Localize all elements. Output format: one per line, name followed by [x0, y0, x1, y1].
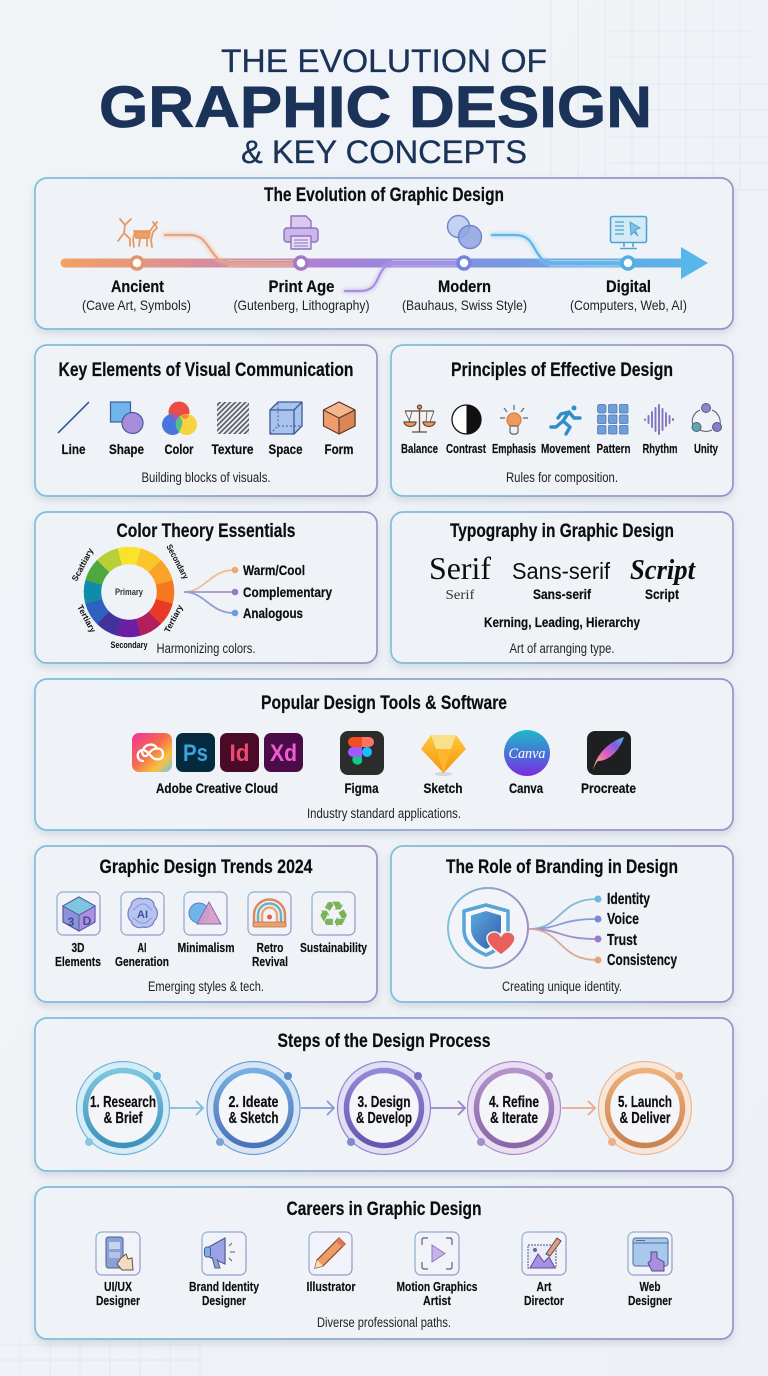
specimen labels: Sans-serif	[533, 586, 591, 602]
trend labels	[55, 940, 368, 969]
heading: key elements: Key Elements of Visual Communication	[58, 359, 354, 381]
icon: contrast	[452, 405, 481, 434]
caption: Art of arranging type.	[510, 641, 614, 656]
element labels: Form	[324, 441, 354, 457]
icon: creative cloud	[132, 733, 172, 772]
color concept labels: Complementary	[243, 584, 332, 600]
element labels: Texture	[212, 441, 254, 457]
step 1	[76, 1062, 170, 1154]
trend labels: AI	[138, 940, 146, 955]
icon: figma	[340, 731, 384, 775]
icon: sustainability recycling	[312, 892, 355, 936]
career labels: Director	[524, 1293, 564, 1308]
icon: brand identity designer	[202, 1232, 246, 1275]
brand branches	[529, 896, 602, 964]
brand labels: Voice	[607, 911, 639, 928]
career labels: Motion Graphics	[396, 1279, 478, 1294]
step 4: 4. Refine	[489, 1094, 539, 1111]
panel: typography	[391, 512, 733, 663]
color concept labels: Analogous	[243, 605, 303, 621]
career labels: Artist	[423, 1293, 452, 1308]
caption: Emerging styles & tech.	[148, 979, 264, 994]
icon: movement runner	[551, 406, 580, 434]
step 1: 1. Research	[90, 1094, 156, 1111]
brand labels: Trust	[607, 932, 637, 949]
color concept labels	[243, 562, 332, 621]
wheel labels: Tertiary	[75, 603, 98, 634]
icon: 3d elements: D	[83, 914, 92, 928]
brand labels: Identity	[607, 891, 650, 908]
heading: careers: Careers in Graphic Design	[286, 1198, 482, 1220]
type specimens	[429, 550, 696, 586]
type specimens: Sans-serif	[512, 558, 611, 584]
type specimens: Serif	[429, 550, 491, 586]
color concept labels: Warm/Cool	[243, 562, 305, 578]
tool labels: Sketch	[424, 780, 462, 796]
icon: canva	[504, 730, 550, 776]
timeline arrow	[65, 247, 708, 279]
specimen labels: Script	[645, 586, 679, 602]
heading: branding: The Role of Branding in Design	[446, 856, 678, 878]
caption: Creating unique identity.	[502, 979, 622, 994]
principle labels: Unity	[694, 441, 719, 456]
wheel labels: Secondary	[164, 542, 191, 581]
icon: space	[270, 402, 302, 434]
heading: color theory: Color Theory Essentials	[116, 520, 296, 542]
icon: photoshop: Ps	[183, 740, 208, 767]
step 3: 3. Design	[358, 1094, 410, 1111]
icon: pattern	[598, 404, 628, 434]
icon: ai generation	[121, 892, 164, 935]
icon: sketch gem	[421, 735, 466, 776]
panel: principles	[391, 345, 733, 496]
panel: key elements	[35, 345, 377, 496]
career labels: Designer	[96, 1293, 140, 1308]
arrow 2	[301, 1101, 334, 1115]
icon: indesign	[220, 733, 259, 772]
principle labels	[401, 441, 719, 456]
arrow 3	[431, 1101, 465, 1115]
tool labels: Procreate	[581, 780, 636, 796]
panel: tools	[35, 679, 733, 830]
career labels	[96, 1279, 672, 1308]
icon: retro revival	[248, 892, 291, 935]
brand labels	[607, 891, 677, 969]
heading: evolution: The Evolution of Graphic Design	[264, 184, 504, 206]
caption: Rules for composition.	[506, 470, 618, 485]
trend labels: Retro	[256, 940, 284, 955]
panel: branding	[391, 846, 733, 1002]
career labels: Designer	[628, 1293, 672, 1308]
step 5: 5. Launch	[618, 1094, 672, 1111]
icon: 3d elements	[57, 892, 100, 935]
wheel labels: Tertiary	[162, 603, 185, 634]
element labels	[62, 441, 354, 457]
career labels: Brand Identity	[189, 1279, 260, 1294]
icon: line	[58, 402, 89, 433]
era labels: Print Age	[268, 277, 334, 296]
trend labels: Elements	[55, 954, 101, 969]
era labels: Digital	[606, 277, 651, 296]
element labels: Space	[268, 441, 303, 457]
wheel labels: Scattiary	[69, 546, 95, 583]
step 2	[207, 1062, 300, 1154]
step 5	[598, 1062, 692, 1154]
trend labels: Sustainability	[300, 940, 368, 955]
icon: web designer	[628, 1232, 672, 1275]
wheel labels	[69, 542, 191, 650]
title: GRAPHIC DESIGN	[99, 75, 652, 140]
icon: ai generation: AI	[137, 909, 148, 921]
icon: form cube	[324, 402, 355, 434]
element labels: Color	[164, 441, 194, 457]
icon: 3d elements: 3	[68, 915, 75, 929]
arrow 4	[562, 1101, 595, 1115]
step 2: & Sketch	[228, 1110, 278, 1127]
timeline connectors	[165, 235, 620, 291]
type specimens: Script	[630, 555, 696, 586]
era labels: (Cave Art, Symbols)	[82, 297, 191, 313]
caption: Industry standard applications.	[307, 806, 461, 821]
brand labels: Consistency	[607, 952, 677, 969]
tool labels: Figma	[344, 780, 379, 796]
icon: color	[162, 402, 197, 435]
era labels: (Gutenberg, Lithography)	[234, 297, 370, 313]
title: THE EVOLUTION OF	[221, 43, 547, 79]
color wheel	[77, 540, 181, 644]
principle labels: Emphasis	[492, 441, 536, 456]
step 5: & Deliver	[620, 1110, 670, 1127]
principle labels: Balance	[401, 441, 438, 456]
panel: design process	[35, 1018, 733, 1171]
icon: shield with heart	[448, 888, 528, 968]
tool labels	[156, 780, 636, 796]
wheel labels: Primary	[115, 587, 143, 597]
element labels: Shape	[109, 441, 144, 457]
typography concepts: Kerning, Leading, Hierarchy	[484, 614, 640, 630]
panel: evolution timeline	[35, 178, 733, 329]
career labels: Art	[536, 1279, 552, 1294]
color concept branches	[184, 567, 238, 616]
principle labels: Pattern	[596, 441, 631, 456]
icon: art director	[522, 1232, 566, 1275]
heading: trends: Graphic Design Trends 2024	[100, 856, 313, 878]
wheel labels: Secondary	[110, 640, 148, 650]
icon: minimalism	[184, 892, 227, 935]
icon: computer monitor	[610, 216, 646, 248]
trend labels: 3D	[72, 940, 84, 955]
icon: motion graphics	[415, 1232, 459, 1275]
icon: indesign: Id	[230, 740, 250, 767]
principle labels: Movement	[541, 441, 591, 456]
step 2: 2. Ideate	[228, 1094, 279, 1111]
tool labels: Canva	[509, 780, 543, 796]
step 3	[338, 1062, 430, 1154]
specimen labels: Serif	[446, 588, 475, 603]
principle labels: Contrast	[446, 441, 486, 456]
panel: trends	[35, 846, 377, 1002]
caption: Diverse professional paths.	[317, 1315, 451, 1330]
timeline nodes	[131, 257, 634, 269]
title	[99, 43, 652, 170]
icon: rhythm waveform	[645, 405, 673, 434]
tool labels: Adobe Creative Cloud	[156, 780, 278, 796]
icon: overlapping circles	[448, 216, 482, 248]
step 3: & Develop	[356, 1110, 412, 1127]
caption: Building blocks of visuals.	[142, 470, 270, 485]
step 4	[468, 1062, 560, 1154]
heading: process: Steps of the Design Process	[278, 1030, 491, 1052]
era labels: (Bauhaus, Swiss Style)	[402, 297, 527, 313]
era labels: Ancient	[111, 277, 164, 296]
career labels: Illustrator	[306, 1279, 356, 1294]
principle labels: Rhythm	[642, 441, 678, 456]
heading: principles: Principles of Effective Design	[451, 359, 673, 381]
icon: canva: Canva	[508, 746, 546, 762]
icon: texture	[217, 402, 249, 434]
career labels: Designer	[202, 1293, 246, 1308]
title: & KEY CONCEPTS	[241, 134, 527, 170]
icon: shape	[110, 402, 143, 434]
icon: cave art	[118, 219, 157, 247]
icon: unity	[692, 404, 722, 432]
panel: careers	[35, 1187, 733, 1339]
caption: Harmonizing colors.	[156, 641, 256, 656]
trend labels: Generation	[115, 954, 169, 969]
arrow 1	[170, 1101, 203, 1115]
icon: balance	[404, 405, 435, 432]
era labels: Modern	[438, 277, 491, 296]
icon: ui/ux designer	[96, 1232, 140, 1275]
icon: xd: Xd	[270, 740, 297, 767]
heading: tools: Popular Design Tools & Software	[261, 692, 507, 714]
element labels: Line	[62, 441, 86, 457]
icon: illustrator pencil	[309, 1232, 352, 1275]
panel: color theory	[35, 512, 377, 663]
era labels	[82, 277, 687, 313]
specimen labels	[446, 586, 679, 603]
icon: photoshop	[176, 733, 215, 772]
step 4: & Iterate	[490, 1110, 538, 1127]
icon: xd	[264, 733, 303, 772]
heading: typography: Typography in Graphic Design	[450, 520, 674, 542]
trend labels: Revival	[252, 954, 288, 969]
icon: procreate	[587, 731, 631, 775]
era labels: (Computers, Web, AI)	[570, 297, 687, 313]
career labels: UI/UX	[104, 1279, 132, 1294]
icon: emphasis	[500, 405, 528, 434]
career labels: Web	[640, 1279, 661, 1294]
icon: printer	[284, 216, 318, 249]
icon: sustainability recycling: ♻	[317, 895, 350, 936]
step 1: & Brief	[104, 1110, 143, 1127]
trend labels: Minimalism	[178, 940, 234, 955]
